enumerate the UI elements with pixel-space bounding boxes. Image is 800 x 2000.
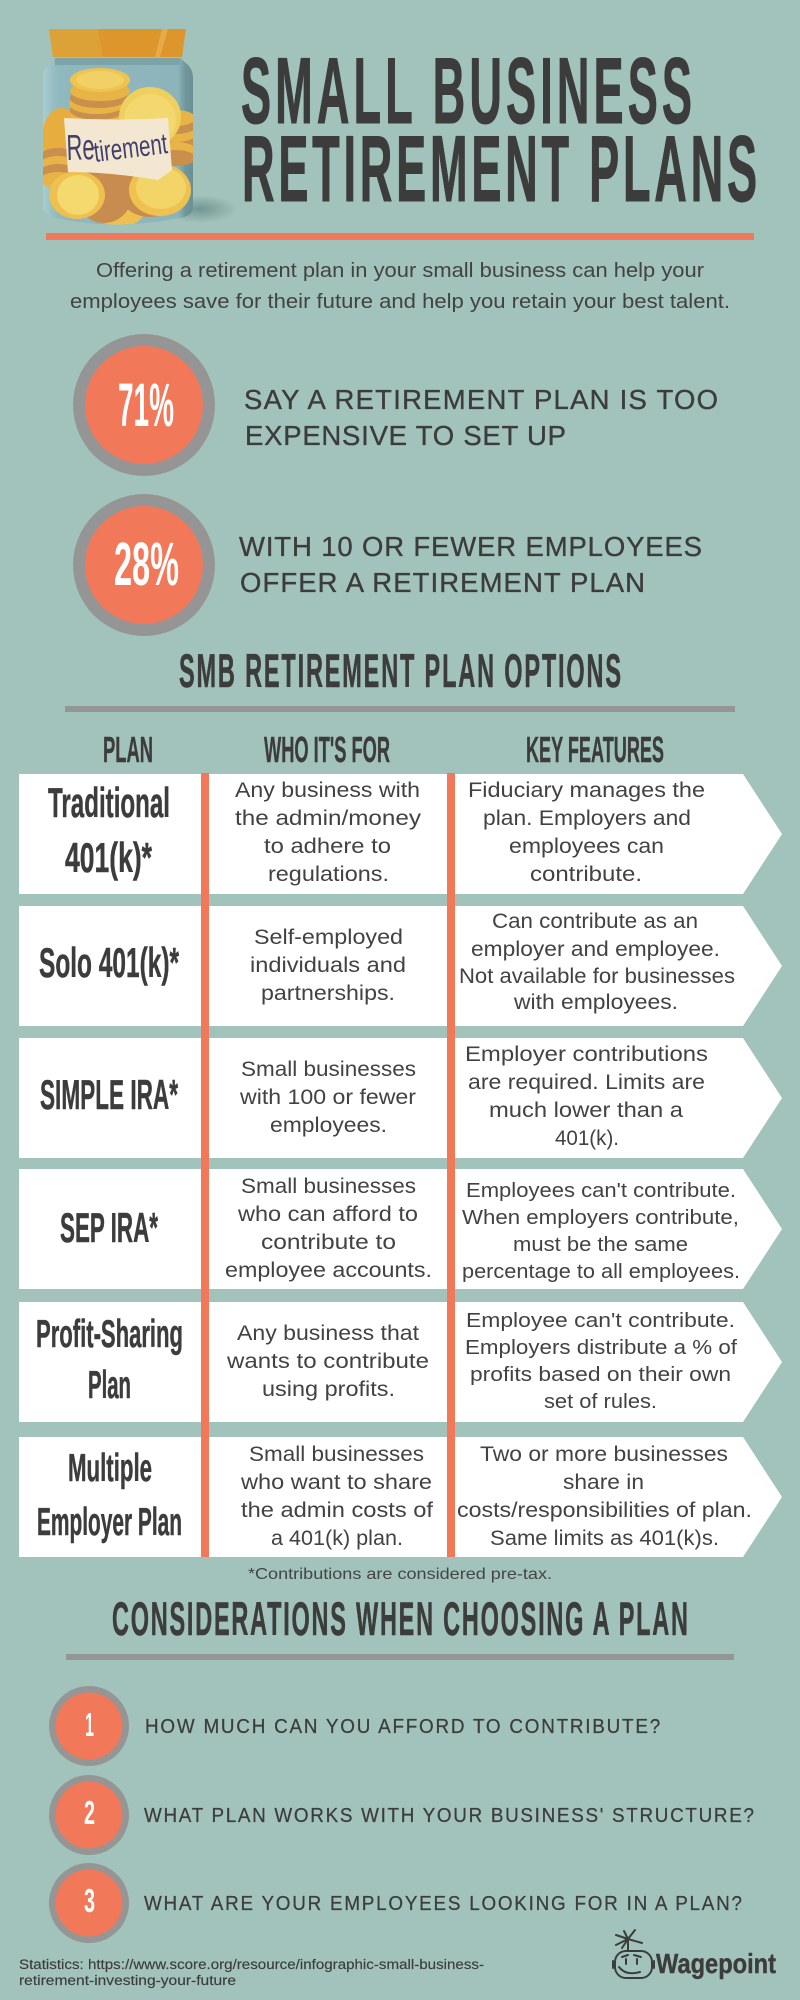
heading: plan options: SMB RETIREMENT PLAN OPTIONS xyxy=(179,644,621,697)
stat: 71 percent xyxy=(73,334,718,476)
jar lid xyxy=(49,29,186,57)
statistics source: retirement-investing-your-future xyxy=(19,1973,236,1988)
table column headers: WHO IT'S FOR xyxy=(264,729,390,770)
row: Multiple Employer Plan: Two or more businesses xyxy=(480,1443,728,1466)
row: Traditional 401(k) xyxy=(19,774,782,894)
jar label xyxy=(64,118,172,180)
row: Traditional 401(k): contribute. xyxy=(530,863,642,886)
statistics source: Statistics: https://www.score.org/resource/infographic-small-business- xyxy=(19,1957,484,1972)
consideration 3: WHAT ARE YOUR EMPLOYEES LOOKING FOR IN A PLAN? xyxy=(144,1892,742,1915)
row: SIMPLE IRA: with 100 or fewer xyxy=(239,1086,416,1109)
row: Multiple Employer Plan: Small businesses xyxy=(249,1443,424,1466)
row: Solo 401(k) xyxy=(19,906,782,1026)
icon: smiling head with antenna xyxy=(613,1930,654,1978)
row: Multiple Employer Plan: who want to share xyxy=(240,1471,432,1494)
row: Solo 401(k): Not available for businesses xyxy=(459,965,735,988)
considerations divider xyxy=(66,1654,734,1660)
row: Profit-Sharing Plan: Employee can't contribute. xyxy=(466,1310,735,1332)
row: SIMPLE IRA: Employer contributions xyxy=(465,1043,708,1066)
row: Traditional 401(k): the admin/money xyxy=(235,807,422,830)
options divider xyxy=(65,706,735,712)
row: SEP IRA: who can afford to xyxy=(237,1203,418,1226)
row: Profit-Sharing Plan xyxy=(19,1302,782,1422)
stat: 28 percent: WITH 10 OR FEWER EMPLOYEES xyxy=(239,531,702,562)
row: Solo 401(k): Self-employed xyxy=(254,926,403,949)
stat: 28 percent xyxy=(73,494,702,636)
row: SEP IRA: SEP IRA* xyxy=(60,1204,158,1251)
row: Multiple Employer Plan: costs/responsibilities of plan. xyxy=(457,1499,752,1522)
row: SEP IRA: Employees can't contribute. xyxy=(466,1180,736,1202)
table column headers xyxy=(103,729,664,770)
consideration 1: HOW MUCH CAN YOU AFFORD TO CONTRIBUTE? xyxy=(145,1715,660,1738)
consideration 2: WHAT PLAN WORKS WITH YOUR BUSINESS' STRUCTURE? xyxy=(144,1804,754,1827)
table column headers: KEY FEATURES xyxy=(526,729,664,770)
row: Solo 401(k): with employees. xyxy=(513,991,678,1014)
row: Traditional 401(k): regulations. xyxy=(268,863,389,886)
table column headers: PLAN xyxy=(103,729,153,770)
row: Traditional 401(k): 401(k)* xyxy=(65,834,152,881)
consideration 2: 2 xyxy=(84,1794,95,1831)
row: Traditional 401(k): plan. Employers and xyxy=(483,807,691,830)
heading: considerations: CONSIDERATIONS WHEN CHOOSING A PLAN xyxy=(112,1592,688,1645)
row: SIMPLE IRA: employees. xyxy=(270,1114,387,1137)
row: Multiple Employer Plan: share in xyxy=(563,1471,644,1494)
row: SEP IRA: contribute to xyxy=(261,1231,396,1254)
row: Multiple Employer Plan: Multiple xyxy=(68,1447,152,1490)
row: Traditional 401(k): employees can xyxy=(509,835,664,858)
row: Traditional 401(k): Fiduciary manages the xyxy=(468,779,705,802)
logo: Wagepoint: Wagepoint xyxy=(656,1948,776,1979)
logo: Wagepoint xyxy=(613,1930,776,1979)
title xyxy=(241,38,757,221)
row: Profit-Sharing Plan: wants to contribute xyxy=(226,1350,429,1373)
row: Multiple Employer Plan: Same limits as 401(k)s. xyxy=(490,1527,719,1550)
row: SIMPLE IRA: are required. Limits are xyxy=(468,1071,705,1094)
stat: 71 percent: SAY A RETIREMENT PLAN IS TOO xyxy=(244,384,718,415)
row: Solo 401(k): employer and employee. xyxy=(471,938,720,961)
row: Traditional 401(k): Any business with xyxy=(235,779,420,802)
row: SEP IRA xyxy=(19,1169,782,1289)
statistics source xyxy=(19,1957,484,1988)
panel: retirement plan table xyxy=(19,773,782,1557)
row: SIMPLE IRA: SIMPLE IRA* xyxy=(40,1071,178,1118)
row: Solo 401(k): Solo 401(k)* xyxy=(39,939,179,986)
column separators xyxy=(201,773,455,1557)
icon: retirement coin jar xyxy=(40,29,238,227)
title: SMALL BUSINESS xyxy=(241,38,692,143)
row: SIMPLE IRA: 401(k). xyxy=(555,1127,619,1150)
row: Profit-Sharing Plan: Any business that xyxy=(237,1322,419,1345)
consideration 1 xyxy=(49,1686,660,1766)
row: Traditional 401(k): Traditional xyxy=(48,779,170,826)
consideration 2 xyxy=(49,1775,754,1855)
row: Profit-Sharing Plan: Profit-Sharing xyxy=(36,1313,183,1356)
row: SEP IRA: must be the same xyxy=(513,1234,688,1256)
title underline xyxy=(46,233,754,240)
stat: 71 percent: EXPENSIVE TO SET UP xyxy=(245,420,566,451)
jar label: Re xyxy=(66,126,95,168)
row: Solo 401(k): Can contribute as an xyxy=(492,910,698,933)
row: Multiple Employer Plan: the admin costs of xyxy=(241,1499,433,1522)
row: Solo 401(k): individuals and xyxy=(250,954,406,977)
consideration 3 xyxy=(49,1863,742,1943)
intro text: Offering a retirement plan in your small business can help your xyxy=(96,259,704,282)
footnote: *Contributions are considered pre-tax. xyxy=(248,1566,552,1583)
consideration 1: 1 xyxy=(85,1706,94,1743)
row: Multiple Employer Plan: Employer Plan xyxy=(37,1501,182,1544)
row: SEP IRA: employee accounts. xyxy=(225,1259,432,1282)
intro text xyxy=(70,259,730,313)
row: SEP IRA: When employers contribute, xyxy=(462,1207,739,1229)
consideration 3: 3 xyxy=(84,1882,95,1919)
row: Profit-Sharing Plan: Plan xyxy=(88,1364,131,1407)
row: Profit-Sharing Plan: using profits. xyxy=(262,1378,395,1401)
stat: 28 percent: 28% xyxy=(114,530,179,598)
row: SIMPLE IRA: Small businesses xyxy=(241,1058,416,1081)
row: SEP IRA: Small businesses xyxy=(241,1175,416,1198)
row: Multiple Employer Plan xyxy=(19,1437,782,1557)
intro text: employees save for their future and help you retain your best talent. xyxy=(70,290,730,313)
stat: 71 percent: 71% xyxy=(118,371,174,439)
row: SEP IRA: percentage to all employees. xyxy=(462,1261,740,1283)
jar label: tirement xyxy=(92,128,169,169)
title: RETIREMENT PLANS xyxy=(242,116,757,221)
row: Profit-Sharing Plan: set of rules. xyxy=(544,1391,657,1413)
row: Multiple Employer Plan: a 401(k) plan. xyxy=(271,1527,403,1550)
row: Traditional 401(k): to adhere to xyxy=(264,835,391,858)
row: Solo 401(k): partnerships. xyxy=(261,982,395,1005)
row: Profit-Sharing Plan: profits based on their own xyxy=(470,1364,731,1386)
row: Profit-Sharing Plan: Employers distribute a % of xyxy=(465,1337,737,1359)
stat: 28 percent: OFFER A RETIREMENT PLAN xyxy=(240,567,645,598)
row: SIMPLE IRA: much lower than a xyxy=(489,1099,683,1122)
row: SIMPLE IRA xyxy=(19,1038,782,1158)
